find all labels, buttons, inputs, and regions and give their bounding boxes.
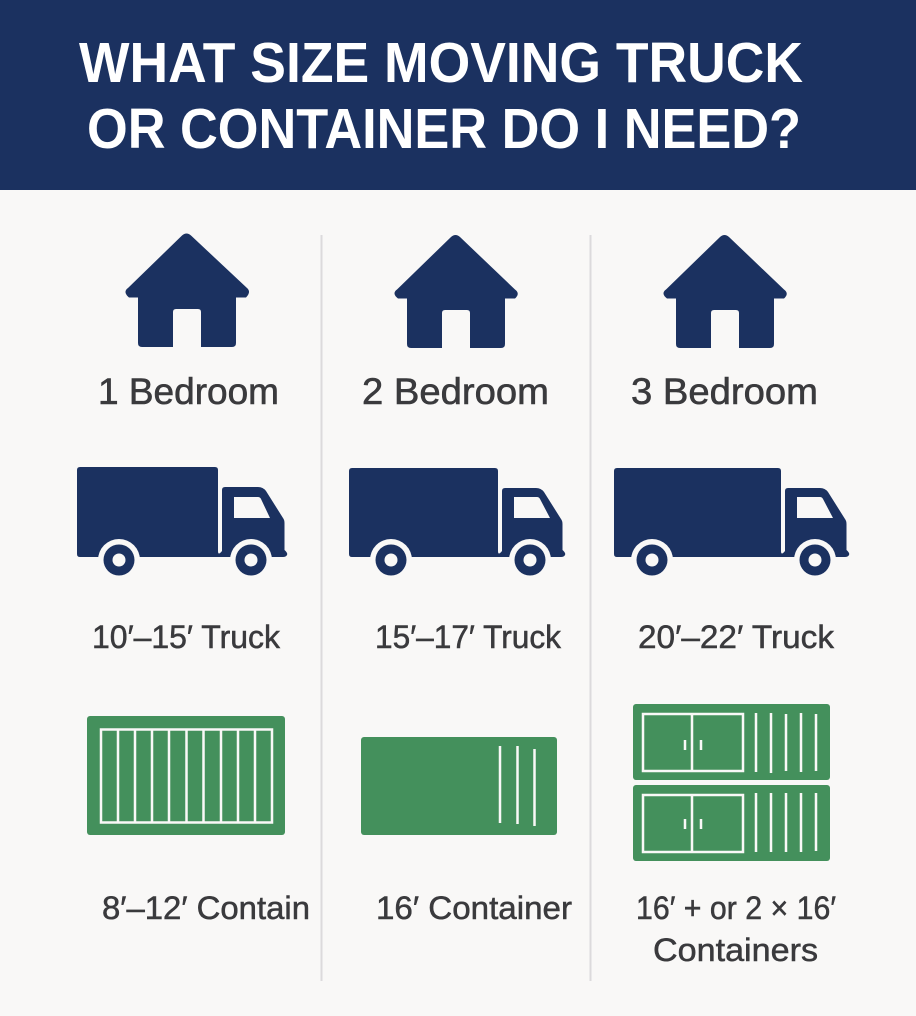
label: 20'-22' Truck: 20′–22′ Truck bbox=[638, 619, 835, 655]
icon: house 1 bbox=[125, 234, 249, 347]
label: 10'-15' Truck: 10′–15′ Truck bbox=[92, 619, 281, 655]
icon: truck 3 bbox=[614, 468, 849, 581]
icon: truck 1 bbox=[77, 467, 287, 581]
label: 1 Bedroom: 1 Bedroom bbox=[98, 371, 279, 412]
label: 15'-17' Truck: 15′–17′ Truck bbox=[375, 619, 562, 655]
title bbox=[79, 31, 803, 161]
label: 16' + or 2 x 16' Containers: 16′ + or 2 × 16′ bbox=[636, 890, 836, 926]
column: 1 Bedroom bbox=[77, 234, 310, 926]
column: 3 Bedroom bbox=[614, 235, 849, 968]
label: 16' Container: 16′ Container bbox=[376, 890, 572, 926]
column: 2 Bedroom bbox=[349, 235, 572, 926]
icon: truck 2 bbox=[349, 468, 565, 581]
label: 8'-12' Contain: 8′–12′ Contain bbox=[102, 890, 310, 926]
icon: house 3 bbox=[663, 235, 787, 348]
icon: container 1 bbox=[87, 716, 285, 835]
icon: two stacked containers bbox=[633, 704, 830, 861]
label: 16' + or 2 x 16' Containers: Containers bbox=[653, 932, 818, 968]
title: OR CONTAINER DO I NEED? bbox=[87, 97, 801, 161]
icon: container 2 bbox=[361, 737, 557, 835]
header banner bbox=[0, 0, 916, 190]
label: 3 Bedroom: 3 Bedroom bbox=[631, 371, 818, 412]
title: WHAT SIZE MOVING TRUCK bbox=[79, 31, 803, 95]
icon: house 2 bbox=[394, 235, 518, 348]
label: 2 Bedroom: 2 Bedroom bbox=[362, 371, 549, 412]
